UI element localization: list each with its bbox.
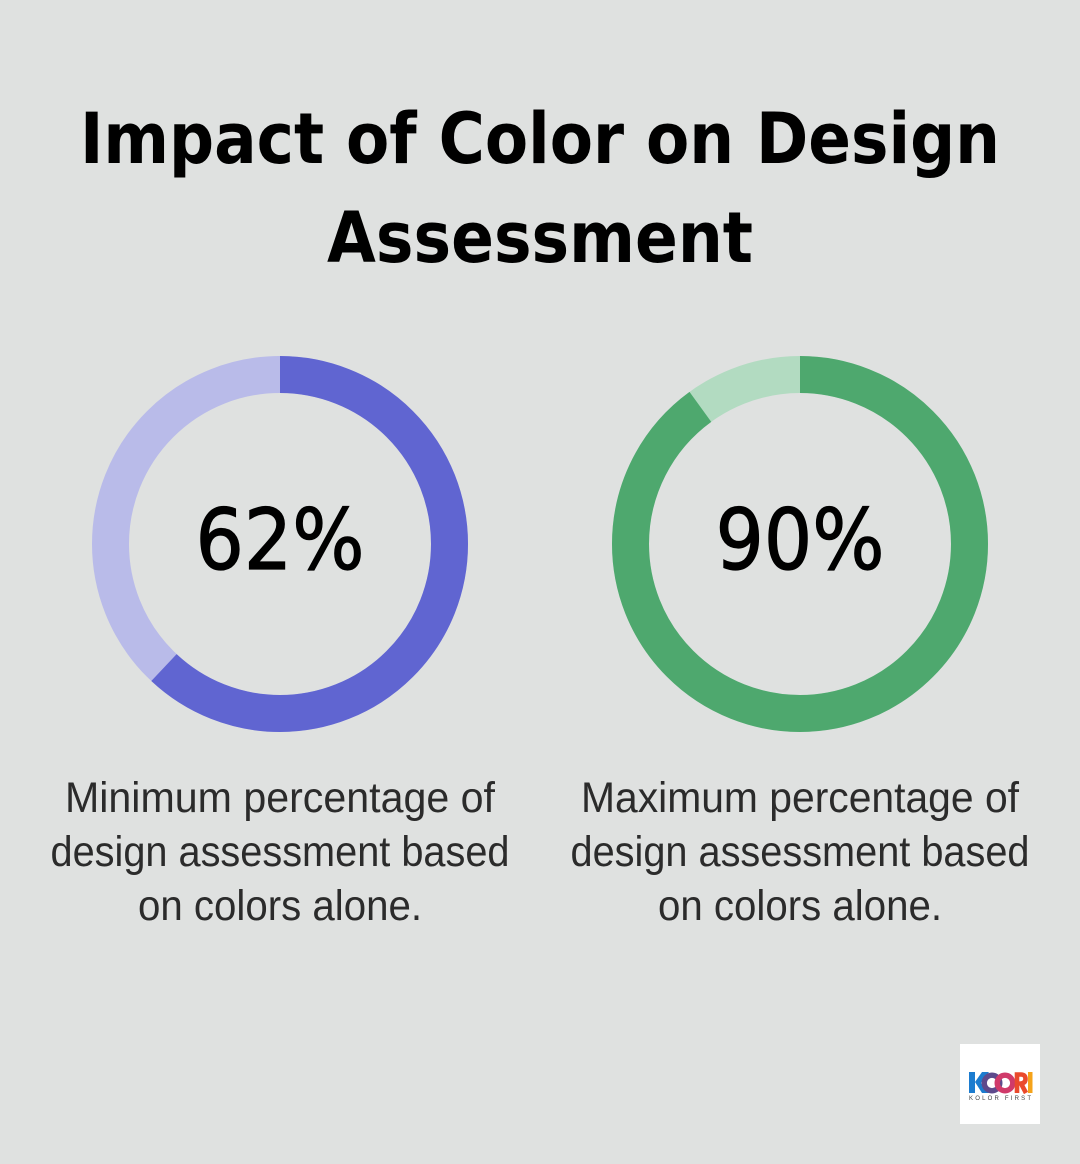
description: maximum: Maximum percentage of xyxy=(581,774,1020,822)
value: 90%: 90% xyxy=(716,491,884,589)
description: maximum: on colors alone. xyxy=(658,882,942,930)
donut chart: 90% xyxy=(630,374,970,714)
panel: minimum percentage xyxy=(50,374,510,930)
logo xyxy=(960,1044,1040,1124)
donut chart: 62% xyxy=(110,374,450,714)
title: Assessment xyxy=(327,197,753,279)
description: maximum: design assessment based xyxy=(570,828,1030,876)
title xyxy=(80,98,1000,279)
logo wordmark xyxy=(969,1072,1032,1093)
title: Impact of Color on Design xyxy=(80,98,1000,180)
description: minimum xyxy=(50,774,510,930)
description: maximum xyxy=(570,774,1030,930)
description: minimum: Minimum percentage of xyxy=(65,774,496,822)
value: 62%: 62% xyxy=(196,491,364,589)
description: minimum: design assessment based xyxy=(50,828,510,876)
description: minimum: on colors alone. xyxy=(138,882,422,930)
logo tagline: KOLOR FIRST xyxy=(969,1096,1031,1102)
panel: maximum percentage xyxy=(570,374,1030,930)
